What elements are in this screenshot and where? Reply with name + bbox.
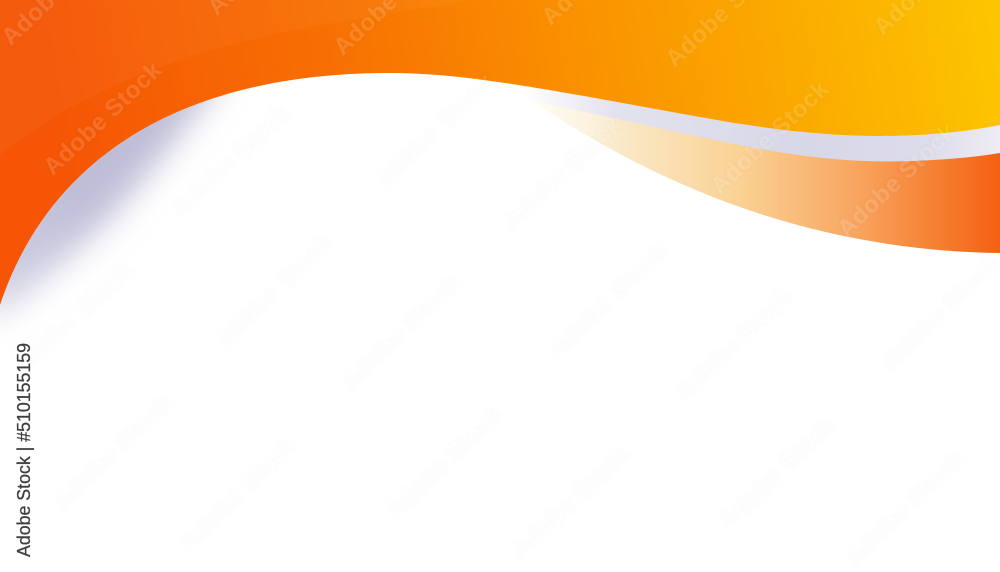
repeated Adobe Stock watermark: Adobe Stock xyxy=(8,256,137,381)
lighter inner fold of the main wave xyxy=(0,0,470,155)
silver band under main wave xyxy=(500,80,1000,162)
repeated Adobe Stock watermark: Adobe Stock xyxy=(210,228,339,353)
repeated Adobe Stock watermark: Adobe Stock xyxy=(713,410,842,535)
repeated Adobe Stock watermark: Adobe Stock xyxy=(506,439,635,564)
stock ID label: Adobe Stock | #510155159 xyxy=(14,343,34,557)
repeated Adobe Stock watermark: Adobe Stock xyxy=(543,238,672,363)
repeated Adobe Stock watermark: Adobe Stock xyxy=(832,118,961,243)
repeated Adobe Stock watermark: Adobe Stock xyxy=(38,56,167,181)
repeated Adobe Stock watermark: Adobe Stock xyxy=(670,281,799,406)
repeated Adobe Stock watermark: Adobe Stock xyxy=(840,446,969,571)
repeated Adobe Stock watermark: Adobe Stock xyxy=(380,400,509,525)
main orange to yellow wave xyxy=(0,0,1000,305)
repeated Adobe Stock watermark: Adobe Stock xyxy=(166,98,295,223)
repeated Adobe Stock watermark: Adobe Stock xyxy=(370,68,499,193)
repeated Adobe Stock watermark: Adobe Stock xyxy=(498,110,627,235)
repeated Adobe Stock watermark: Adobe Stock xyxy=(705,75,834,200)
repeated Adobe Stock watermark: Adobe Stock xyxy=(174,431,303,556)
repeated Adobe Stock watermark: Adobe Stock xyxy=(336,270,465,395)
orange ribbon wave on right xyxy=(530,100,1000,253)
silver shadow crescent on left xyxy=(0,94,228,322)
repeated Adobe Stock watermark: Adobe Stock xyxy=(48,390,177,515)
